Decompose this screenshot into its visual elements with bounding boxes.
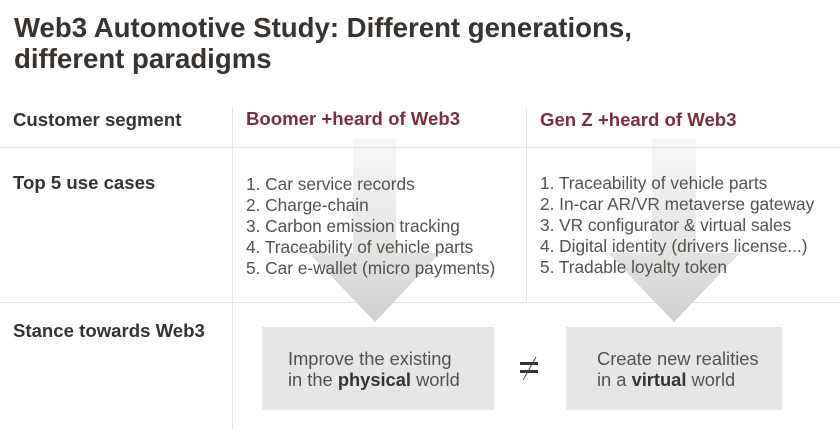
arrow: boomer: [309, 138, 440, 322]
title: [14, 12, 632, 74]
list: gen z use cases: 5. Tradable loyalty token: [540, 257, 727, 277]
box: virtual world: in a virtual world: [597, 369, 735, 390]
list: gen z use cases: 1. Traceability of vehicle parts: [540, 173, 767, 193]
column heading: boomer: Boomer +heard of Web3: [246, 108, 460, 129]
column heading: gen z: Gen Z +heard of Web3: [540, 109, 736, 130]
list: boomer use cases: 2. Charge-chain: [246, 195, 369, 215]
box: virtual world: [566, 327, 782, 410]
row label: top 5 use cases: Top 5 use cases: [13, 172, 155, 193]
row label: stance towards web3: Stance towards Web3: [13, 320, 205, 341]
box: physical world: Improve the existing: [288, 348, 452, 369]
row label: customer segment: Customer segment: [13, 109, 181, 130]
box: physical world: in the physical world: [288, 369, 460, 390]
list: gen z use cases: [540, 173, 814, 277]
box: virtual world: Create new realities: [597, 348, 759, 369]
not equal symbol: [520, 356, 538, 380]
list: gen z use cases: 3. VR configurator & virtual sales: [540, 215, 791, 235]
list: boomer use cases: 3. Carbon emission tracking: [246, 216, 460, 236]
list: gen z use cases: 2. In-car AR/VR metaverse gateway: [540, 194, 814, 214]
list: gen z use cases: 4. Digital identity (drivers license...): [540, 236, 807, 256]
list: boomer use cases: [246, 174, 495, 278]
list: boomer use cases: 5. Car e-wallet (micro payments): [246, 258, 495, 278]
arrow: gen z: [608, 138, 740, 322]
list: boomer use cases: 1. Car service records: [246, 174, 415, 194]
title: different paradigms: [14, 43, 272, 74]
list: boomer use cases: 4. Traceability of vehicle parts: [246, 237, 473, 257]
box: physical world: [262, 327, 494, 410]
title: Web3 Automotive Study: Different generations,: [14, 12, 632, 43]
